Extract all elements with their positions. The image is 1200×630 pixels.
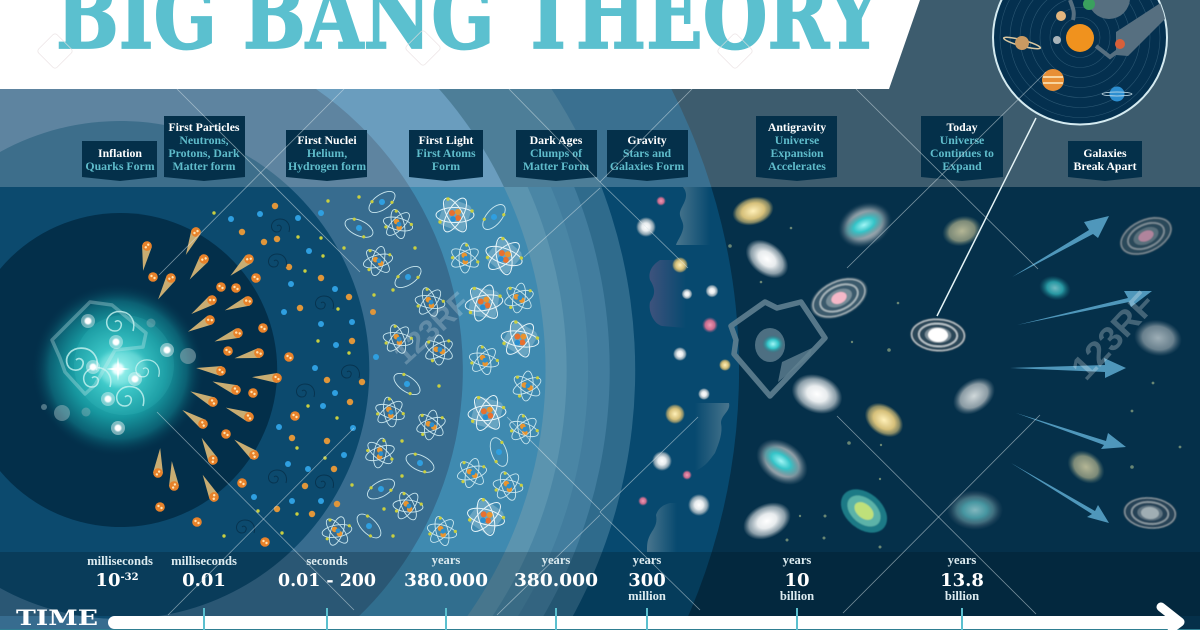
label: Antigravity: Universe <box>775 133 819 147</box>
expansion arrows <box>1010 216 1152 523</box>
timeline strip: 10 <box>784 570 810 591</box>
label: Gravity: Galaxies Form <box>610 159 684 173</box>
label: Antigravity: Accelerates <box>768 159 826 173</box>
stock watermark: 123RF <box>388 286 477 371</box>
label: First Nuclei: Helium, <box>307 146 347 160</box>
stars of the gravity era <box>636 196 731 516</box>
label: Dark Ages: Matter Form <box>523 159 589 173</box>
particles field <box>212 195 441 538</box>
label: First Light: Form <box>432 159 460 173</box>
label: Galaxies Break Apart <box>1068 141 1142 181</box>
Mars <box>1115 39 1125 49</box>
label: First Light: First Light <box>419 133 473 147</box>
Venus <box>1056 11 1066 21</box>
timeline strip: milliseconds <box>87 554 153 568</box>
timeline strip <box>0 552 1200 616</box>
arrow 5 <box>1011 463 1109 523</box>
timeline strip: billion <box>945 589 979 603</box>
Sun <box>1066 24 1094 52</box>
Earth <box>1083 0 1095 10</box>
timeline strip: -32 <box>120 572 139 583</box>
label: First Particles: Protons, Dark <box>168 146 240 160</box>
core flash <box>106 357 130 381</box>
Jupiter <box>1042 69 1064 91</box>
arrow 3 <box>1010 358 1126 378</box>
timeline strip: 380.000 <box>514 570 598 591</box>
label: Antigravity <box>756 116 837 181</box>
Neptune <box>1102 86 1132 102</box>
Mercury <box>1053 36 1061 44</box>
label: Dark Ages: Clumps of <box>530 146 583 160</box>
galaxies <box>729 192 1185 547</box>
nucleus: singularity glow <box>32 284 204 456</box>
atoms <box>319 187 547 550</box>
timeline strip: 0.01 <box>182 570 226 591</box>
label: Inflation: Quarks Form <box>85 159 155 173</box>
label: First Nuclei <box>286 130 367 181</box>
title watermarks <box>37 30 753 69</box>
label: First Particles: Matter form <box>172 159 236 173</box>
timeline strip: years <box>432 553 460 567</box>
label: Antigravity: Antigravity <box>768 120 826 134</box>
nebula clouds <box>647 187 729 552</box>
label: Today <box>921 116 1003 181</box>
label: Antigravity: Expansion <box>770 146 824 160</box>
Saturn <box>1003 35 1041 51</box>
label: Gravity: Gravity <box>627 133 667 147</box>
label: First Light <box>409 130 483 181</box>
timeline strip: 10 <box>95 570 120 591</box>
timeline strip: years <box>783 553 811 567</box>
title banner <box>0 0 920 89</box>
watermark camera <box>731 302 825 396</box>
quark comets <box>138 226 300 547</box>
spiral galaxies <box>804 209 1179 542</box>
timeline strip: years <box>948 553 976 567</box>
label: Gravity <box>607 130 688 181</box>
arrow 4 <box>1016 413 1126 449</box>
label: Today: Expand <box>942 159 982 173</box>
label: Inflation: Inflation <box>98 146 142 160</box>
timeline strip: 0.01 - 200 <box>278 570 376 591</box>
label: First Nuclei: Hydrogen form <box>288 159 366 173</box>
label: Today: Today <box>946 120 978 134</box>
solar system inset <box>937 0 1172 316</box>
arrow 2 <box>1017 291 1152 325</box>
timeline strip: 13.8 <box>940 570 984 591</box>
label: Today: Universe <box>940 133 984 147</box>
label: Galaxies Break Apart: Break Apart <box>1073 159 1137 173</box>
timeline strip: 300 <box>628 570 666 591</box>
label: First Nuclei: First Nuclei <box>297 133 357 147</box>
timeline strip: billion <box>780 589 814 603</box>
label: Gravity: Stars and <box>623 146 672 160</box>
timeline strip: milliseconds <box>171 554 237 568</box>
era labels <box>82 116 1142 181</box>
label: First Light: First Atoms <box>416 146 476 160</box>
timeline strip: years <box>542 553 570 567</box>
label: Today: Continues to <box>930 146 994 160</box>
label: First Particles: First Particles <box>168 120 240 134</box>
label: Inflation <box>82 141 157 181</box>
header band with lighter rings <box>0 89 1200 187</box>
timeline strip: million <box>628 589 666 603</box>
label: Galaxies Break Apart: Galaxies <box>1083 146 1127 160</box>
time axis arrow <box>0 605 1200 630</box>
label: First Particles <box>164 116 245 181</box>
time label: TIME <box>16 605 98 630</box>
timeline strip: 380.000 <box>404 570 488 591</box>
label: First Particles: Neutrons, <box>179 133 229 147</box>
label: Dark Ages <box>516 130 597 181</box>
timeline strip: years <box>633 553 661 567</box>
label: Dark Ages: Dark Ages <box>530 133 583 147</box>
background specks <box>728 227 1181 548</box>
stock watermark: 123RF <box>1064 285 1163 387</box>
timeline strip: seconds <box>306 554 348 568</box>
arrow 1 <box>1012 216 1109 277</box>
